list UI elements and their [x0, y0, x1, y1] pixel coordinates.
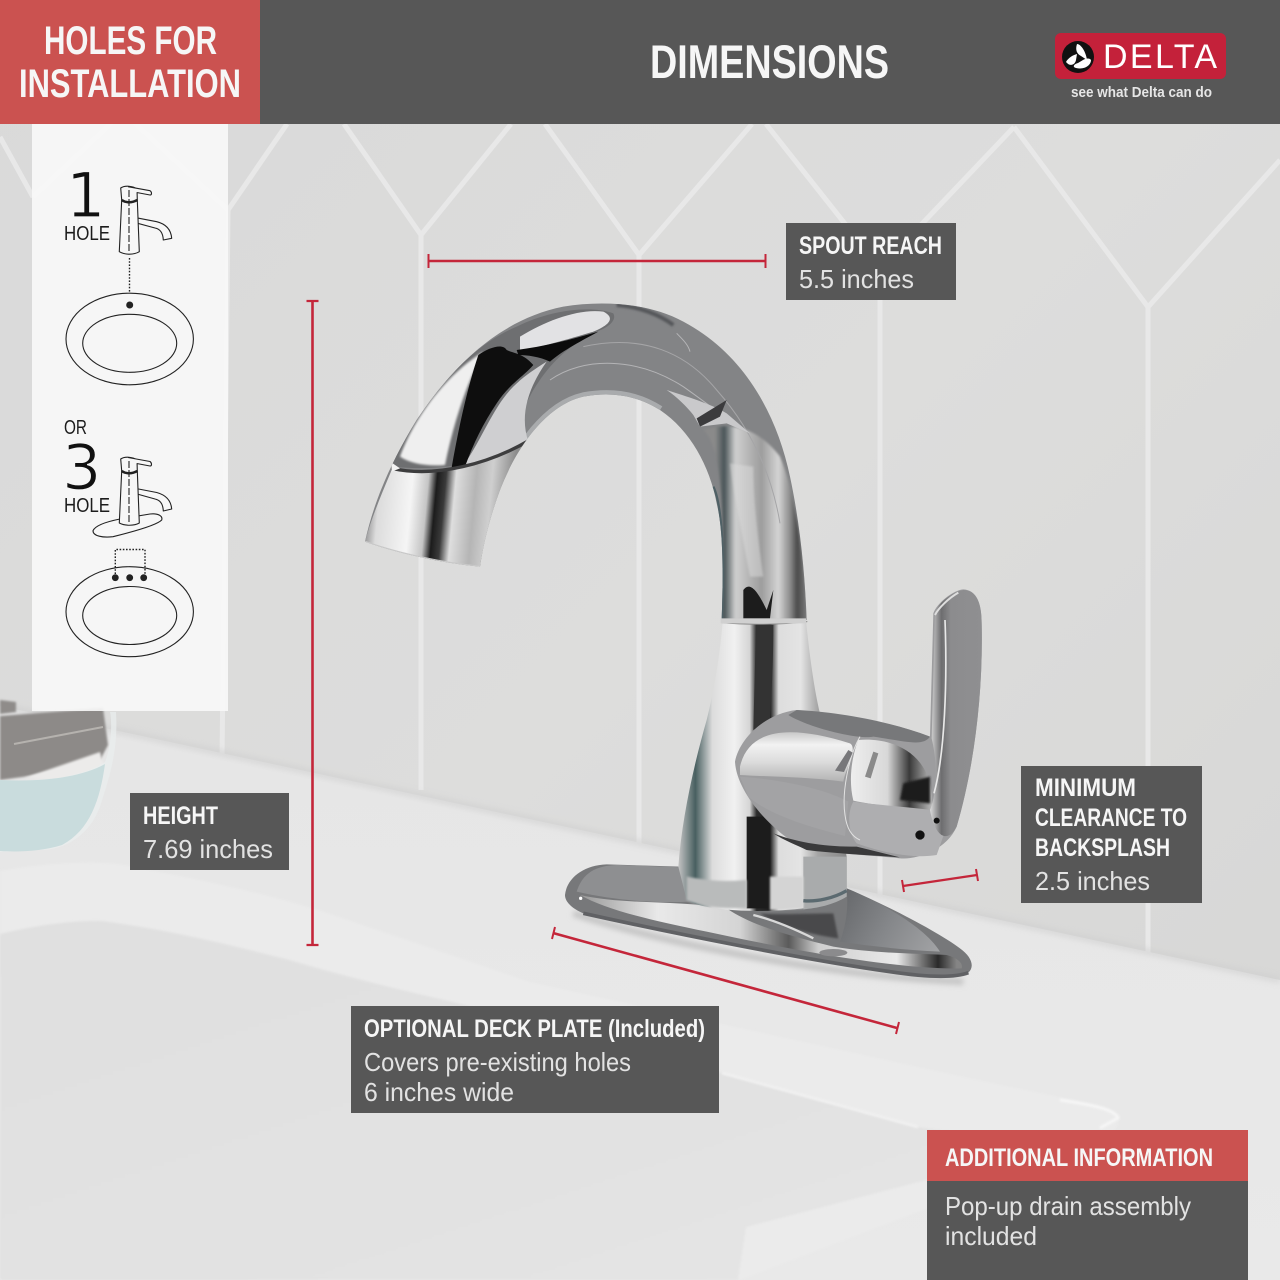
sink basin with rim: [0, 863, 1118, 1280]
arrow: height dimension: [306, 301, 318, 945]
callout: optional deck plate: [351, 1006, 719, 1113]
callout: minimum clearance: [1021, 766, 1202, 903]
callout: spout reach: SPOUT REACH: [799, 232, 942, 260]
callout: minimum clearance: BACKSPLASH: [1035, 834, 1170, 862]
option: 1 hole: 1: [66, 159, 105, 232]
icon: sink three holes: [66, 567, 193, 657]
callout: optional deck plate: 6 inches wide: [364, 1077, 514, 1107]
callout: additional information: included: [945, 1221, 1037, 1251]
curved spout: [365, 304, 807, 620]
header bar: [260, 0, 1280, 124]
arrow: backsplash clearance dimension: [902, 869, 978, 892]
icon: faucet with deck plate: [93, 457, 172, 537]
callout: minimum clearance: 2.5 inches: [1035, 866, 1150, 896]
logo: Delta: DELTA: [1103, 38, 1217, 76]
option: 3 hole: HOLE: [64, 495, 110, 517]
option: 3 hole: OR: [64, 417, 87, 439]
arrow: spout reach dimension: [428, 254, 766, 268]
callout: optional deck plate: Covers pre-existing holes: [364, 1047, 631, 1077]
arrow: deck plate width dimension: [552, 927, 899, 1034]
callout: additional information: Pop-up drain assembly: [945, 1191, 1191, 1221]
callout: minimum clearance: MINIMUM: [1035, 774, 1136, 802]
callout: height: HEIGHT: [143, 802, 218, 830]
callout: minimum clearance: CLEARANCE TO: [1035, 804, 1187, 832]
faucet: [350, 290, 982, 982]
logo: Delta: see what Delta can do: [1071, 84, 1212, 101]
callout: spout reach: [786, 223, 956, 300]
callout: spout reach: 5.5 inches: [799, 264, 914, 294]
callout: optional deck plate: OPTIONAL DECK PLATE (Included): [364, 1015, 705, 1043]
callout: height: [130, 793, 289, 870]
logo: Delta: [1055, 33, 1226, 101]
decor: teal bowl with folded items: [0, 700, 116, 852]
icon: faucet single hole: [119, 186, 172, 254]
panel: hole options: [32, 124, 228, 711]
handle hub and lever: [735, 589, 982, 859]
option: 1 hole: [64, 159, 193, 385]
option: 1 hole: HOLE: [64, 223, 110, 245]
callout: additional information: ADDITIONAL INFORMATION: [945, 1144, 1213, 1172]
countertop: [0, 706, 1280, 1280]
callout: height: 7.69 inches: [143, 834, 273, 864]
swivel collar top: [721, 618, 806, 623]
main title: DIMENSIONS: [650, 35, 889, 88]
option: 3 hole: 3: [62, 431, 101, 504]
heading: holes for installation: [0, 0, 260, 124]
deck plate: [565, 864, 972, 982]
heading: holes for installation: HOLES FOR: [44, 19, 217, 63]
heading: holes for installation: INSTALLATION: [19, 62, 241, 106]
icon: sink one hole: [66, 293, 193, 385]
callout: additional information: [927, 1130, 1248, 1280]
option: 3 hole: [62, 417, 193, 657]
base and body: [678, 617, 847, 911]
